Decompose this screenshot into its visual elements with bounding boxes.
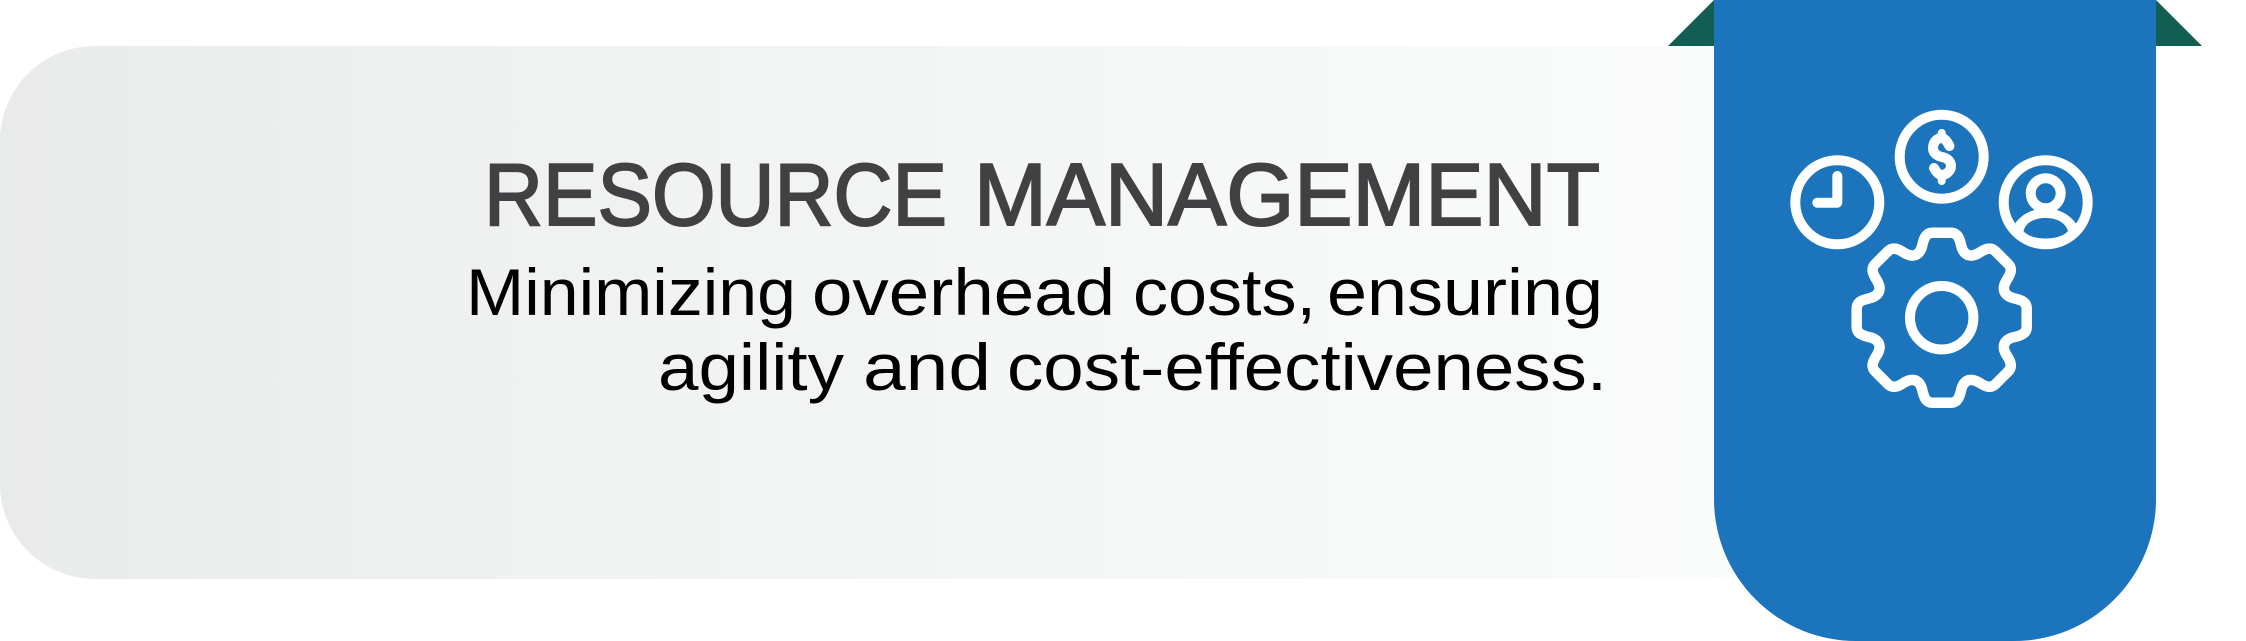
ribbon fold: right dark green triangle xyxy=(2156,0,2202,46)
icon: person xyxy=(2004,160,2088,247)
panel: grey gradient background xyxy=(0,46,1800,579)
description line 1: overhead xyxy=(812,255,1115,329)
description text block xyxy=(466,255,1607,404)
icon: clock xyxy=(1795,160,1879,244)
ribbon: blue banner xyxy=(1714,0,2156,641)
description line 1: costs, xyxy=(1133,255,1316,329)
icon: dollar coin xyxy=(1900,115,1984,199)
description line 2: agility xyxy=(658,330,844,404)
description line 2: and xyxy=(863,330,991,404)
description line 2: cost-effectiveness. xyxy=(1007,330,1607,404)
icon: gear xyxy=(1857,233,2027,403)
description line 1: Minimizing xyxy=(466,255,796,329)
ribbon fold: left dark green triangle xyxy=(1668,0,1714,46)
title: MANAGEMENT xyxy=(974,145,1600,244)
title: RESOURCE xyxy=(484,145,947,244)
description line 1: ensuring xyxy=(1327,255,1603,329)
icon: resource management xyxy=(1795,115,2088,403)
